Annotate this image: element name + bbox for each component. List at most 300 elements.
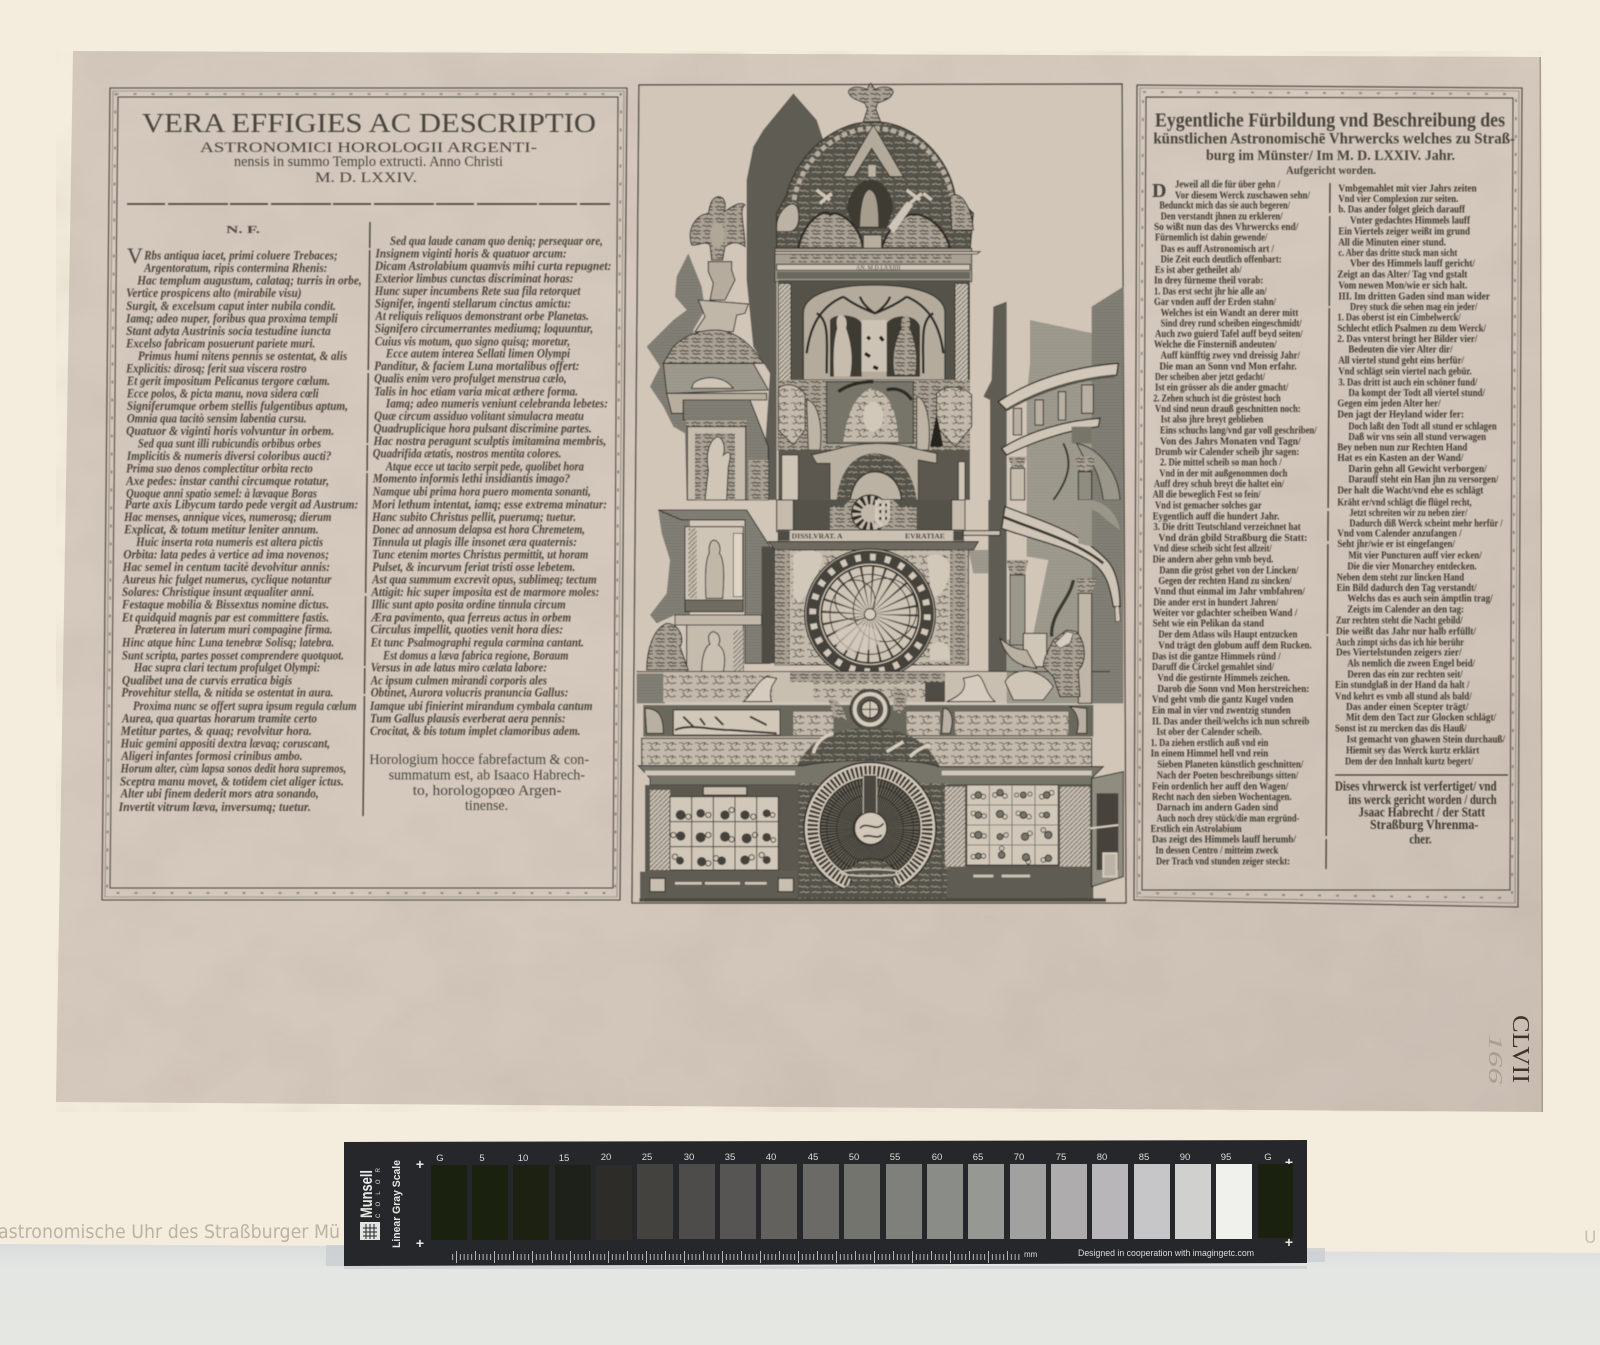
chart credit: Designed in cooperation with imagingetc.com xyxy=(1078,1248,1254,1259)
chart body xyxy=(344,1140,1307,1266)
chart title: Linear Gray Scale xyxy=(391,1160,403,1248)
German poem, right column upper: All viertel stund geht eins herfür/ xyxy=(1338,355,1465,367)
German poem, left column lower: Gegen der rechten Hand zu sincken/ xyxy=(1158,575,1292,587)
German poem, right column lower: Ein Bild dadurch den Tag verstandt/ xyxy=(1337,582,1477,594)
German title: künstlichen Astronomischē Vhrwercks welches zu Straß- xyxy=(1153,130,1515,147)
Latin poem, right column lower: Mori lethum intentat, iamq; esse extrema minatur: xyxy=(371,498,607,511)
entablature with date inscription: AN. M.D.LXXIIII xyxy=(856,265,901,271)
Latin poem, right column upper: Atque ecce ut tacito serpit pede, quolibet hora xyxy=(385,459,584,473)
Latin poem, right column lower: Hanc subito Christus pellit, puerumq; tuetur. xyxy=(371,510,576,524)
German poem, right column upper: 2. Das vnterst bringt her Bilder vier/ xyxy=(1337,333,1478,345)
German poem, right column upper: Darauff steht ein Han jhn zu versorgen/ xyxy=(1348,474,1499,486)
panel: German text xyxy=(1134,85,1522,907)
German poem, left column upper xyxy=(1153,179,1317,501)
German poem, left column upper: 2. Zehen schuch ist die gröstest hoch xyxy=(1153,392,1281,404)
Latin poem, right column lower: Ast qua summum excrevit opus, sublimeq; tectum xyxy=(371,573,597,587)
German poem, left column lower: 1. Da ziehen erstlich auß vnd ein xyxy=(1151,737,1268,749)
ornamental frame: German panel xyxy=(1134,85,1522,907)
Latin poem, right column upper: Hac nostra peragunt sculptis imitamina membris, xyxy=(373,434,606,448)
logo xyxy=(358,1167,382,1240)
cast shadow behind main tower xyxy=(747,93,823,500)
Latin poem, left column lower xyxy=(118,498,358,814)
Latin poem, left column lower: Et quidquid magnis par est committere fastis. xyxy=(121,611,329,624)
German poem, left column upper: Vor diesem Werck zuschawen sehn/ xyxy=(1175,189,1311,201)
Latin poem, left column upper: Sed qua sunt illi rubicundis orbibus orbes xyxy=(138,437,321,451)
German poem, left column lower: Weiter vor gdachter scheiben Wand / xyxy=(1153,607,1298,619)
German poem, right column upper: All die Minuten einer stund. xyxy=(1338,236,1446,248)
German poem, left column lower: Vnnd thut einmal im Jahr vmbfahren/ xyxy=(1154,586,1306,598)
upper frieze with small dial xyxy=(643,687,1093,737)
swatch labels: G xyxy=(1264,1152,1272,1163)
panel: Latin text xyxy=(102,88,627,900)
Latin poem, left column upper: Ecce polos, & picta manu, nova sidera cœli xyxy=(126,387,319,401)
German poem, right column upper: b. Das ander folget gleich darauff xyxy=(1338,204,1465,216)
lower frieze xyxy=(642,727,1092,767)
Latin poem, left column upper: Signiferumque orbem stellis fulgentibus aptum, xyxy=(127,399,348,413)
German poem, left column lower xyxy=(1151,500,1312,867)
Latin poem, left column lower: Orbita: lata pedes à vertice ad ima novenos; xyxy=(123,548,329,562)
German poem, right column upper: Vom newen Mon/wie er sich halt. xyxy=(1338,279,1468,291)
gallery rail line xyxy=(637,670,1110,673)
Latin poem, right column upper: Dicam Astrolabium quamvis mihi curta repugnet: xyxy=(374,259,611,273)
swatch labels: 40 xyxy=(766,1152,776,1163)
title rule xyxy=(127,203,610,205)
German poem, left column lower: Vnd ist gemacher solches gar xyxy=(1155,500,1262,512)
engraving, upper half xyxy=(647,83,1123,500)
Latin poem, left column lower: Invertit vitrum læva, inversumq; tuetur. xyxy=(118,800,311,814)
Latin poem, left column lower: Sunt scripta, partes posset comprendere quotquot. xyxy=(122,648,344,662)
German poem, right column upper: Vnd vier Complexion zur seiten. xyxy=(1338,193,1459,205)
logo: Munsell xyxy=(358,1170,376,1218)
title: Vera Effigies: ASTRONOMICI HOROLOGII ARGENTI- xyxy=(200,140,537,156)
registration marks: + xyxy=(1285,1234,1293,1250)
German poem, left column upper: Vnd sind neun drauß geschnitten noch: xyxy=(1155,403,1301,415)
left zodiac table grid xyxy=(670,797,778,870)
Latin poem, left column upper: Hac templum augustum, calataq; turris in orbe, xyxy=(136,273,362,287)
logo: COLOR xyxy=(376,1167,382,1218)
Latin poem, right column lower: Ac ipsum culmen mirandi corporis ales xyxy=(370,673,547,687)
German poem, left column lower: Seht wie ein Pelikan da stand xyxy=(1153,618,1264,630)
drop cap V: V xyxy=(127,243,143,268)
Latin poem, left column lower: Proxima nunc se offert supra ipsum regula cœlum xyxy=(133,699,357,713)
German poem, right column upper: Vnter gedachtes Himmels lauff xyxy=(1350,215,1470,227)
Latin poem, right column lower: Donec ad annosum delapsa est hora Chremetem, xyxy=(371,523,585,536)
Latin poem, right column lower: Tum Gallus plausis everberat aera pennis: xyxy=(370,712,566,726)
German poem, right column upper: Gegen eim jeden Alter her/ xyxy=(1337,398,1441,410)
Latin poem, left column lower: Aureus hic fulget numerus, cyclique notantur xyxy=(122,573,332,587)
German poem, right column lower: Das ander einen Scepter trägt/ xyxy=(1346,701,1469,713)
registration marks: + xyxy=(416,1156,424,1172)
German poem, left column lower: Sieben Planeten künstlich geschnitten/ xyxy=(1157,759,1304,771)
swatch labels xyxy=(436,1152,1272,1164)
German poem, left column upper: Die Zeit euch deutlich offenbart: xyxy=(1161,254,1282,266)
Latin poem, left column upper: Excelso fabricam posuerunt pariete muri. xyxy=(125,337,315,351)
Latin poem, left column lower: Huic gemini appositi dextra lævaq; coruscant, xyxy=(120,737,330,751)
German poem, left column upper: Fürnemlich ist dahin gewende/ xyxy=(1155,232,1268,244)
German poem, left column lower: Vnd geht vmb die gantz Kugel vnden xyxy=(1152,694,1293,706)
main astrolabe dial xyxy=(805,549,935,680)
German poem, left column upper: Bedunckt mich das sie auch begeren/ xyxy=(1159,200,1291,212)
folio mark in ink: CLVII xyxy=(1507,1015,1533,1083)
swatch labels: 10 xyxy=(518,1153,528,1164)
entablature with date inscription xyxy=(775,248,980,282)
swatch labels: 55 xyxy=(890,1152,900,1163)
German poem, left column upper: Der scheiben aber jetzt gedacht/ xyxy=(1155,371,1266,383)
German poem, left column lower: Vnd diese scheib sicht fest allzeit/ xyxy=(1153,543,1272,555)
German poem, right column lower: Mit dem den Tact zur Glocken schlägt/ xyxy=(1346,712,1497,724)
figures and shield in upper niche xyxy=(830,315,920,377)
Latin poem, left column lower: Solares: Christique insunt æqualiter anni. xyxy=(122,585,314,599)
German poem, right column lower: Zeigts im Calender an den tag: xyxy=(1347,604,1464,616)
Latin poem, left column upper: Vertice prospicens alto (mirabile visu) xyxy=(126,286,301,300)
Latin poem, left column lower: Alter ubi finem dederit mors atra sonando, xyxy=(120,787,319,801)
German poem, left column lower: In einem Himmel hell vnd rein xyxy=(1151,748,1268,760)
colour chart shadow xyxy=(326,1245,1325,1269)
swatch labels: 60 xyxy=(932,1152,942,1163)
Latin poem, left column upper: Prima suo denos complectitur orbita recto xyxy=(126,462,313,476)
Latin poem, left column lower: Qualibet una de curvis erratica bigis xyxy=(122,673,292,687)
German poem, right column lower: Als nemlich die zween Engel beid/ xyxy=(1347,658,1476,670)
Latin poem, right column lower xyxy=(369,498,607,738)
figures panel with shields xyxy=(778,380,972,450)
column divider xyxy=(363,222,370,818)
German poem, left column lower: In dessen Centro / mitteim zweck xyxy=(1155,845,1279,857)
German poem, right column lower xyxy=(1335,496,1506,767)
aged paper sheet xyxy=(56,51,1543,1112)
German poem, right column upper: Den jagt der Heyland wider fer: xyxy=(1337,409,1464,421)
registration marks: + xyxy=(1285,1154,1293,1170)
spiral staircase and gallery upper xyxy=(998,363,1120,500)
Latin poem, left column lower: Huic inserta rota numeris est altera pictis xyxy=(135,535,323,549)
German poem, right column upper: Doch laßt den Todt all stund er schlagen xyxy=(1348,420,1497,432)
title: Vera Effigies xyxy=(142,108,596,186)
Latin poem, left column lower: Provehitur stella, & nitida se ostentat in aura. xyxy=(121,686,334,700)
German poem, right column upper: Schlecht etlich Psalmen zu dem Werck/ xyxy=(1337,322,1487,334)
German poem, right column lower: Seht jhr/wie er ist eingefangen/ xyxy=(1337,538,1456,550)
German poem, left column lower: Der Trach vnd stunden zeiger steckt: xyxy=(1156,855,1290,867)
swatch labels: 80 xyxy=(1097,1152,1107,1163)
German poem, left column upper: Eins schuchs lang/vnd gar voll geschriben/ xyxy=(1160,424,1317,436)
German poem, right column upper: 3. Das dritt ist auch ein schöner fund/ xyxy=(1338,376,1478,388)
German poem, left column upper: Das es auff Astronomisch art / xyxy=(1161,243,1275,255)
Latin poem, right column upper: Quadruplicique hora pulsant discrimine partes. xyxy=(373,422,592,436)
maker's colophon, German: Straßburg Vhrenma- xyxy=(1370,817,1478,832)
Latin poem, left column upper: Implicitis & numeris diversi coloribus aucti? xyxy=(126,449,331,463)
German title: Eygentliche Fürbildung vnd Beschreibung des xyxy=(1155,110,1505,132)
balustrade with putti xyxy=(663,672,1007,702)
registration marks xyxy=(416,1154,1293,1251)
German poem, right column upper: Drey stuck die sehen mag ein jeder/ xyxy=(1350,301,1478,313)
swatch labels: 5 xyxy=(479,1153,485,1164)
German poem, left column lower: Das ist die gantze Himmels ründ / xyxy=(1152,650,1281,662)
swatch labels: 25 xyxy=(642,1152,652,1163)
swatch labels: 45 xyxy=(808,1152,818,1163)
Latin poem, right column upper: Ecce autem interea Sellati limen Olympi xyxy=(385,347,570,361)
German poem, left column lower: Die andern aber gehn vmb beyd. xyxy=(1153,554,1274,566)
Latin poem, right column upper: Signifer, ingenti stellarum cinctus amictu: xyxy=(375,297,571,311)
Latin poem, right column upper: Exterior limbus cunctas discriminat horas: xyxy=(374,272,574,286)
large perpetual calendar dial xyxy=(804,762,936,900)
German poem, right column upper: Vnd schlägt sein viertel nach gebür. xyxy=(1338,366,1472,378)
engraving frame xyxy=(632,84,1126,903)
German poem, left column lower: Ein mal in vier vnd zwentzig stunden xyxy=(1152,704,1291,716)
German poem, right column lower: Dem der den Innhalt kurtz begert/ xyxy=(1345,755,1474,767)
Latin poem, left column lower: Aurea, qua quartas horarum tramite certo xyxy=(121,712,317,726)
German poem, left column lower: Fein ordenlich her auff den Wagen/ xyxy=(1152,780,1289,792)
millimetre ruler xyxy=(451,1251,1021,1263)
German poem, right column upper: Bedeuten die vier Alter dir/ xyxy=(1348,344,1453,356)
clock crown ornament xyxy=(848,83,893,122)
German title: burg im Münster/ Im M. D. LXXIV. Jahr. xyxy=(1206,148,1455,164)
Latin poem, left column upper: Surgit, & excelsum caput inter nubila condit. xyxy=(126,299,336,313)
Latin poem, right column lower: Æra pavimento, qua ferreus actus in orbem xyxy=(370,611,571,624)
Latin poem, right column upper: Iamq; adeo numeris veniunt celebranda lebetes: xyxy=(385,397,608,411)
Latin poem, left column upper: Rbs antiqua iacet, primi coluere Trebaces; xyxy=(143,248,338,262)
German poem, left column lower: Vnd die gestirnte Himmels zeichen. xyxy=(1157,672,1290,684)
Latin poem, right column upper xyxy=(372,234,611,498)
left lion xyxy=(647,623,688,670)
German title xyxy=(1153,110,1515,177)
rooster on side tower xyxy=(690,197,745,260)
German poem, right column lower: Ein stundglaß in der Hand da halt / xyxy=(1335,679,1470,691)
German poem, left column lower: Auch noch drey stück/die man ergründ- xyxy=(1157,812,1300,824)
German poem, left column lower: Die ander erst in hundert Jahren/ xyxy=(1153,596,1279,608)
Latin poem, left column lower: Explicat, & totum metitur leniter annum. xyxy=(123,523,319,536)
German poem, right column upper: 1. Das oberst ist ein Cimbelwerck/ xyxy=(1337,312,1461,324)
Latin poem, left column lower: Hac semel in centum tacitè devolvitur annis: xyxy=(122,560,330,574)
upper chamber xyxy=(778,280,970,450)
Latin poem, left column lower: Parte axis Libycum tardo pede vergit ad Austrum: xyxy=(125,498,358,511)
German poem, right column lower: Welchs das es auch sein ämptlin trag/ xyxy=(1347,593,1493,605)
German poem, right column lower: Zur rechten steht die Nacht gebild/ xyxy=(1336,614,1463,626)
German poem, left column lower: II. Das ander theil/welchs ich nun schreib xyxy=(1152,715,1309,727)
base cornice xyxy=(638,760,1103,785)
pencil number: 166 xyxy=(1484,1034,1506,1084)
title: Vera Effigies: VERA EFFIGIES AC DESCRIPTIO xyxy=(142,108,596,138)
Latin poem, right column upper: Qualis enim vero profulget menstrua cælo, xyxy=(374,372,567,386)
maker's colophon, German xyxy=(1335,779,1497,846)
German poem, right column upper: Vber des Himmels lauff gericht/ xyxy=(1350,258,1476,270)
swatch labels: 85 xyxy=(1139,1152,1149,1163)
German poem, left column lower: 3. Die dritt Teutschland verzeichnet hat xyxy=(1153,521,1301,533)
maker's colophon, Latin: to, horologopœo Argen- xyxy=(413,783,562,799)
Latin poem, right column upper: Hunc super incumbens Rete sua fila retorquet xyxy=(374,284,581,298)
Latin poem, left column upper: Et gerit impositum Pelicanus tergore cœlum. xyxy=(126,374,330,388)
Latin poem, left column upper: Axe pedes: instar canthi circumque rotatur, xyxy=(125,474,329,488)
maker's colophon, Latin: summatum est, ab Isaaco Habrech- xyxy=(389,768,585,783)
German poem, right column lower: Vnd vom Calender anzufangen / xyxy=(1337,528,1462,540)
German poem, left column upper: Auch zwo guierd Tafel auff beyd seiten/ xyxy=(1155,328,1303,340)
lower cast shadows xyxy=(637,500,1123,703)
Latin poem, right column lower: Attigit: hic super imposita est de marmore moles: xyxy=(371,585,599,599)
German poem, right column lower: Hiemit sey das Werck kurtz erklärt xyxy=(1346,744,1480,756)
German poem, right column lower: Mit vier Puncturen auff vier ecken/ xyxy=(1348,550,1482,562)
German poem, left column upper: So wißt nun das des Vhrwercks end/ xyxy=(1154,221,1299,233)
Latin poem, left column upper: Quoque anni spatio semel: à lævaque Boras xyxy=(126,487,317,501)
maker's colophon, German: Dises vhrwerck ist verfertiget/ vnd xyxy=(1335,779,1497,794)
German poem, right column upper: Bey neben nun zur Rechten Hand xyxy=(1337,441,1467,453)
right zodiac table grid xyxy=(967,785,1058,865)
Latin poem, left column upper xyxy=(125,248,362,501)
German poem, left column upper: Ist also jhre breyt geblieben xyxy=(1161,414,1263,426)
German poem, right column lower: Des Viertelstunden zeigers zier/ xyxy=(1336,646,1462,658)
German poem, left column lower: Das zeigt des Himmels lauff herumb/ xyxy=(1152,834,1297,846)
ruler unit: mm xyxy=(1024,1250,1038,1259)
swatch labels: 65 xyxy=(973,1152,983,1163)
Latin poem, right column upper: At reliquis reliquos demonstrant orbe Planetas. xyxy=(375,309,589,323)
Latin poem, right column upper: Insignem viginti horis & quatuor arcum: xyxy=(375,247,567,261)
Latin poem, left column lower: Sceptra manu movet, & totidem ciet aliger ictus. xyxy=(120,774,344,788)
Latin poem, left column upper: Quatuor & viginti horis volvuntur in orbem. xyxy=(126,424,334,438)
swatch labels: 75 xyxy=(1056,1152,1066,1163)
maker's colophon, Latin xyxy=(369,752,589,814)
German poem, left column lower: Dann die gröst gehet von der Lincken/ xyxy=(1159,564,1299,576)
German poem, right column lower: Jetzt schreiten wir zu neben zier/ xyxy=(1349,507,1468,519)
German poem, left column upper: All die beweglich Fest so fein/ xyxy=(1153,489,1261,501)
Latin poem, right column upper: Momento informis lethi insidiantis imago? xyxy=(372,472,570,486)
Latin poem, right column lower: Circulus impellit, quoties venit hora dies: xyxy=(371,623,563,637)
German poem, right column lower: Deren das ein zur rechten seit/ xyxy=(1347,668,1463,680)
Latin poem, right column upper: Cuius vis motum, quo signo quisq; moretur, xyxy=(375,334,570,348)
heading: N. F.: N. F. xyxy=(226,224,260,236)
German poem, left column lower: Daruff die Circkel gemahlet sind/ xyxy=(1152,661,1275,673)
maker's colophon, German: Jsaac Habrecht / der Statt xyxy=(1358,805,1485,820)
registration marks: + xyxy=(416,1235,424,1251)
German poem, left column upper: Sind drey rund scheiben eingeschmidt/ xyxy=(1161,317,1302,329)
side tower upper xyxy=(663,262,768,500)
handwritten caption fragment: U xyxy=(1584,1228,1596,1248)
Latin poem, left column lower: Hinc atque hinc Luna tenebræ Solisq; latebra. xyxy=(121,636,334,650)
Latin poem, left column upper: Stant adyta Austrinis socia testudine iuncta xyxy=(126,324,331,338)
cornice and ornament panel around main dial xyxy=(768,542,978,665)
German poem, right column upper: III. Im dritten Gaden sind man wider xyxy=(1338,290,1490,302)
German poem, left column upper: Ist ein grösser als die ander gmacht/ xyxy=(1155,382,1289,394)
Latin poem, right column lower: Iamque ubi finierint mirandum cymbala cantum xyxy=(369,699,592,713)
side tower lower xyxy=(658,510,777,702)
swatch labels: 95 xyxy=(1221,1152,1231,1163)
German poem, left column upper: Es ist aber getheilet ab/ xyxy=(1155,264,1242,276)
German poem, left column upper: Die man an Sonn vnd Mon erfahr. xyxy=(1159,360,1297,372)
maker's colophon, Latin: Horologium hocce fabrefactum & con- xyxy=(369,752,589,768)
drop cap D: D xyxy=(1152,180,1166,202)
German poem, left column upper: Drumb wir Calender scheib jhr sagen: xyxy=(1155,446,1299,458)
German poem, right column upper: c. Aber das dritte stuck man sicht xyxy=(1338,247,1458,259)
German poem, left column lower: Vnd trägt den globum auff dem Rucken. xyxy=(1158,639,1312,651)
gray swatches xyxy=(431,1164,1293,1240)
arch below figures xyxy=(778,444,970,500)
maker's colophon, German: ins werck gericht worden / durch xyxy=(1348,792,1497,807)
German poem, left column lower: Erstlich ein Astrolabium xyxy=(1151,823,1242,835)
German poem, right column upper: Da kompt der Todt all viertel stund/ xyxy=(1348,387,1486,399)
German poem, left column upper: Welche die Finsterniß andeuten/ xyxy=(1154,339,1277,351)
Latin motto band: EVRATIAE xyxy=(905,531,945,540)
German poem, left column lower: Recht nach den sieben Wochentagen. xyxy=(1152,791,1292,803)
Latin poem, left column lower: Horum alter, cùm lapsa sonos dedit hora supremos, xyxy=(120,762,346,776)
German poem, right column lower: Sonst ist zu mercken das dis Hauß/ xyxy=(1335,722,1467,734)
German poem, left column lower: Eygentlich auff die hundert Jahr. xyxy=(1153,510,1280,522)
German poem, right column upper: Der halt die Wacht/vnd ehe es schlägt xyxy=(1337,485,1484,497)
Latin poem, left column upper: Omnia qua tacitò sensim labentia cursu. xyxy=(127,412,307,426)
cast shadows on right wall xyxy=(983,287,1123,500)
German poem, left column upper: In drey fürneme theil vorab: xyxy=(1154,275,1263,287)
German poem, left column upper: Jeweil all die für über gehn / xyxy=(1175,179,1281,191)
colophon rule xyxy=(1335,774,1508,776)
German poem, right column lower: Die die vier Monarchey entdecken. xyxy=(1347,560,1477,572)
German poem, right column upper: Vmbgemahlet mit vier Jahrs zeiten xyxy=(1338,183,1477,195)
German poem, right column lower: Auch zimpt sichs das ich hie berühr xyxy=(1336,636,1464,648)
title: Vera Effigies: M. D. LXXIV. xyxy=(315,170,417,186)
Latin poem, left column lower: Metitur partes, & quaq; revolvitur hora. xyxy=(120,724,312,738)
Latin poem, right column upper: Namque ubi prima hora puero momenta sonanti, xyxy=(372,484,591,498)
dome with tracery xyxy=(777,122,973,250)
Latin poem, right column lower: Tinnula ut plagis ille insonet æra quaternis: xyxy=(372,535,577,549)
title: Vera Effigies: nensis in summo Templo extructi. Anno Christi xyxy=(234,154,503,170)
German poem, right column upper: Hat es ein Kasten an der Wand/ xyxy=(1337,452,1464,464)
cast shadow behind side tower xyxy=(647,253,705,500)
German poem, left column lower: Vnd drän gbild Straßburg die Statt: xyxy=(1158,532,1307,544)
Latin poem, left column lower: Hac supra clari tectum profulget Olympi: xyxy=(133,661,320,675)
engraving ground line xyxy=(639,898,1106,902)
swatch labels: 90 xyxy=(1180,1152,1190,1163)
Latin poem, right column lower: Pulset, & incurvum feriat tristi osse lebetem. xyxy=(372,560,575,574)
Latin motto band xyxy=(778,530,1000,542)
Munsell linear gray scale chart xyxy=(344,1140,1307,1266)
Latin poem, right column lower: Tunc etenim mortes Christus permittit, ut horam xyxy=(372,548,588,562)
Latin poem, right column upper: Sed qua laude canam quo deniq; persequar ore, xyxy=(390,234,603,248)
Latin poem, left column upper: Explicitis: dirosq; ferit sua viscera rostro xyxy=(125,362,307,376)
maker's colophon, German: cher. xyxy=(1409,831,1432,846)
German poem, right column upper xyxy=(1337,183,1499,497)
swatch labels: G xyxy=(436,1153,444,1164)
central clock case xyxy=(777,495,965,533)
German poem, left column upper: 1. Das erst secht jhr hie alle an/ xyxy=(1154,285,1267,297)
German poem, right column lower: Ist gemacht von ghawen Stein durchauß/ xyxy=(1347,734,1506,746)
Latin poem, right column upper: Talis in hoc etiam varia micat æthere forma. xyxy=(374,384,578,398)
Latin poem, left column lower: Hac menses, annique vices, numerosq; dierum xyxy=(123,510,331,524)
Latin motto band: DISSLVRAT. A xyxy=(792,531,843,540)
German poem, left column lower: Nach der Poeten beschreibungs sitten/ xyxy=(1157,769,1299,781)
German title: Aufgericht worden. xyxy=(1286,163,1376,177)
German poem, left column upper: Gar vnden auff der Erden stahn/ xyxy=(1154,296,1277,308)
German poem, left column upper: Auff drey schuh breyt die haltet ein/ xyxy=(1154,478,1285,490)
German poem, left column upper: 2. Die mittel scheib so man hoch / xyxy=(1160,457,1282,469)
Latin poem, right column lower: Est domus a læva fabrica regione, Boraum xyxy=(382,648,568,662)
swatch labels: 15 xyxy=(559,1153,569,1164)
German poem, right column lower: Die weißt das Jahr nur halb erfüllt/ xyxy=(1336,625,1477,637)
Latin poem, right column upper: Panditur, & faciem Luna mortalibus offert: xyxy=(374,359,579,373)
Latin poem, left column lower: Aligeri infantes formosi crinibus ambo. xyxy=(120,749,303,763)
German poem, left column upper: Auff künfftig zwey vnd dreissig Jahr/ xyxy=(1161,350,1301,362)
German poem, left column lower: Ist ober der Calender scheib. xyxy=(1157,726,1262,738)
German poem, right column lower: Dadurch diß Werck scheint mehr herfür / xyxy=(1349,518,1503,530)
swatch labels: 30 xyxy=(684,1152,694,1163)
German poem, right column upper: Daß wir vns sein all stund verwagen xyxy=(1348,431,1486,443)
handwritten caption on mount: astronomische Uhr des Straßburger Mü xyxy=(0,1221,340,1243)
spiral staircase lower xyxy=(1002,500,1120,703)
German poem, right column lower: Kräht er/vnd schlägt die flügel recht, xyxy=(1337,496,1472,508)
swatch labels: 35 xyxy=(725,1152,735,1163)
German poem, left column lower: Darob die Sonn vnd Mon herstreichen: xyxy=(1157,683,1309,695)
German poem, right column upper: Darin gehn all Gewicht verborgen/ xyxy=(1348,463,1487,475)
German poem, right column upper: Zeigt an das Alter/ Tag vnd gstalt xyxy=(1337,269,1468,281)
panel: engraving of the astronomical clock xyxy=(632,83,1126,903)
German poem, right column lower: Vnd kehrt es vmb all stund als bald/ xyxy=(1335,690,1472,702)
Latin poem, right column upper: Signifero circumerrantes mediumq; loquuntur, xyxy=(375,322,593,336)
German poem, left column upper: Den verstandt jhnen zu erkleren/ xyxy=(1161,210,1283,222)
Latin poem, right column lower: Illic sunt apto posita ordine tinnula circum xyxy=(371,598,566,612)
Latin poem, right column upper: Quæ circum assiduo volitant simulacra meatu xyxy=(374,409,584,423)
German poem, left column lower: Darnach im andern Gaden sind xyxy=(1157,802,1278,814)
